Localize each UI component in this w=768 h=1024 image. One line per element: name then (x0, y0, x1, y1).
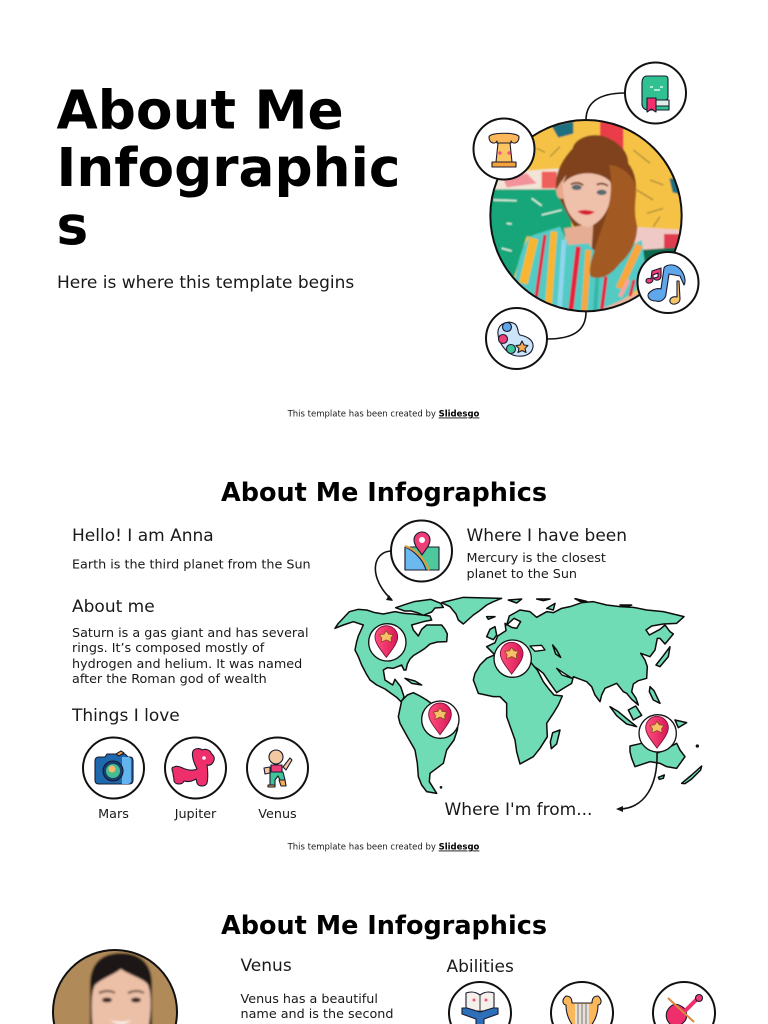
footer credit: This template has been created by Slidesgo (287, 842, 480, 852)
Greenland (442, 597, 502, 624)
text block: about me: rings. It’s composed mostly of (72, 641, 265, 656)
text block: about me: hydrogen and helium. It was named (72, 657, 302, 672)
text block: where I have been (466, 526, 627, 582)
heading: abilities: Abilities (446, 957, 514, 977)
text block: about me (72, 597, 309, 687)
North America (335, 609, 447, 702)
arrow: Australia to label (616, 752, 657, 812)
section 2 heading: About Me Infographics (221, 478, 547, 508)
pin: Europe (494, 640, 531, 677)
Eurasia (487, 602, 684, 705)
label: where I'm from: Where I'm from... (444, 800, 592, 820)
islands (405, 599, 702, 789)
pin: Australia (639, 715, 676, 752)
pin: North America (369, 624, 406, 661)
text block: Venus: Venus has a beautiful (240, 992, 378, 1007)
label: Mars: Mars (98, 807, 129, 822)
Australia (630, 743, 685, 768)
icon: book (625, 62, 686, 124)
icon: music notes (638, 252, 698, 313)
arrow: map icon to map (375, 551, 393, 601)
label: Jupiter: Jupiter (174, 807, 217, 822)
section 3 heading: About Me Infographics (221, 911, 547, 941)
connector lines (547, 93, 625, 339)
footer credit: This template has been created by Slidesgo (287, 410, 480, 420)
item: Jupiter balloon dog (165, 738, 226, 798)
pin: South America (422, 701, 459, 738)
icon: column (474, 118, 534, 180)
South America (398, 693, 458, 793)
text block: Venus: Venus (240, 956, 292, 976)
text block: about me: after the Roman god of wealth (72, 672, 267, 687)
title: s (56, 195, 88, 257)
photo: girl in striped dress (487, 117, 687, 317)
text block: Venus: name and is the second (240, 1007, 393, 1022)
text block: about me: About me (72, 597, 155, 617)
photo: woman portrait (50, 948, 180, 1024)
title (56, 80, 400, 257)
icon: paint palette (486, 308, 547, 369)
item: Mars camera (83, 738, 144, 798)
title: About Me (56, 80, 344, 142)
label: Venus: Venus (258, 807, 297, 822)
text block: where I have been: Where I have been (466, 526, 627, 546)
subtitle: Here is where this template begins (57, 273, 354, 293)
icon: lyre (551, 982, 613, 1024)
Africa (473, 654, 562, 764)
text block: where I have been: Mercury is the closest (466, 551, 606, 566)
icon: violin (653, 982, 715, 1024)
heading: things I love: Things I love (71, 706, 180, 726)
icon: book on stand (449, 982, 511, 1024)
text block: about me: Saturn is a gas giant and has several (72, 626, 309, 641)
item: Venus dancing baby (247, 738, 308, 798)
Black Sea and Persian Gulf (530, 645, 572, 678)
icon: map pin (391, 520, 452, 582)
Arctic islands (396, 599, 443, 615)
text block: hello: Earth is the third planet from the Sun (72, 558, 311, 572)
text block: hello (72, 526, 311, 572)
text block: hello: Hello! I am Anna (72, 526, 214, 546)
text block: where I have been: planet to the Sun (466, 567, 577, 582)
title: Infographic (56, 137, 400, 199)
text block: Venus (240, 956, 393, 1024)
profile photo with hobby icons (474, 62, 698, 369)
world map (335, 597, 702, 793)
